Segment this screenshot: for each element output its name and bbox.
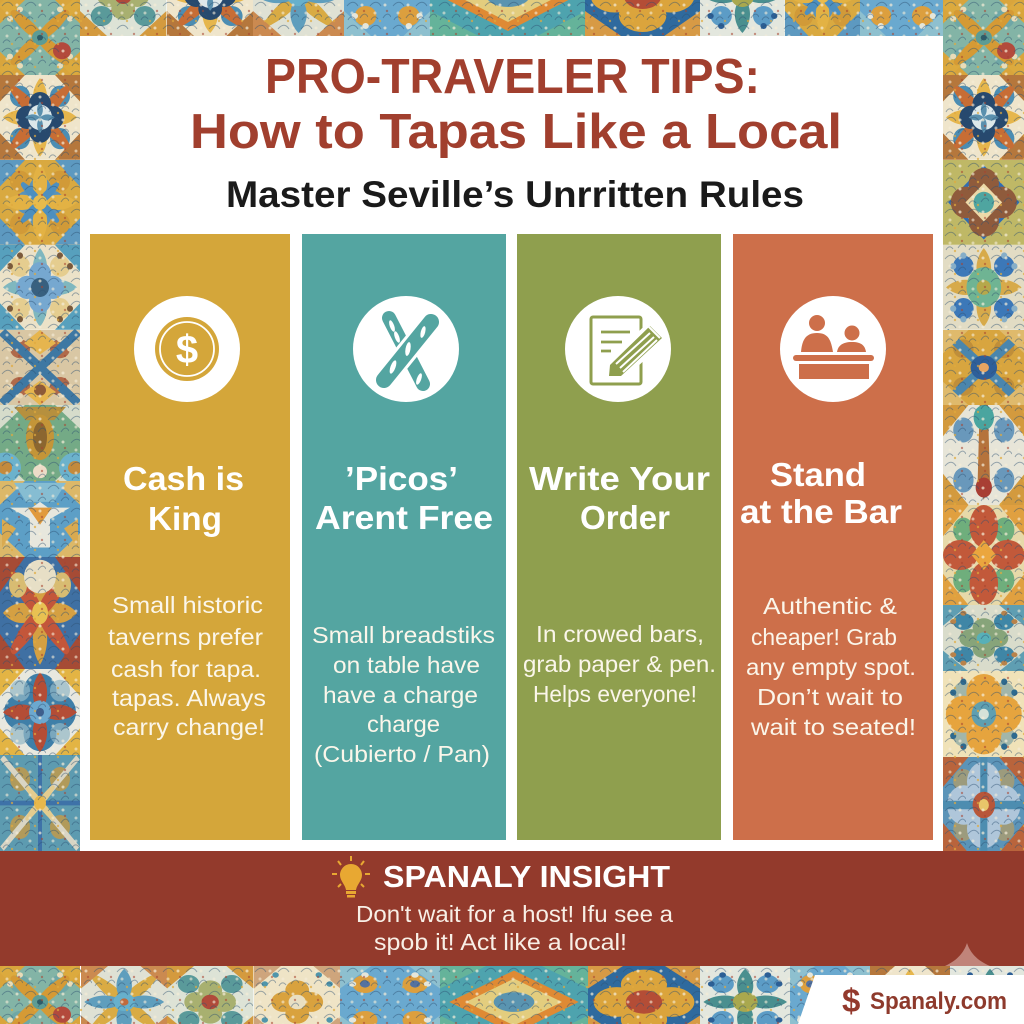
icon: dollar coin: $ xyxy=(176,328,198,372)
text: Stand at the Bar body: any empty spot. xyxy=(746,654,916,680)
heading: Write Your Order xyxy=(529,460,710,536)
heading: Picos Aren't Free: ’Picos’ xyxy=(345,460,458,497)
text: Stand at the Bar body: Authentic & xyxy=(763,593,897,619)
text: Write Your Order body: In crowed bars, xyxy=(536,621,704,647)
panel: Picos Aren't Free xyxy=(302,234,506,840)
text: insight body: Don't wait for a host! Ifu see a xyxy=(356,901,673,927)
text: Stand at the Bar body: wait to seated! xyxy=(750,714,916,740)
title xyxy=(190,50,842,159)
panel: Cash is King xyxy=(90,234,290,840)
text: Cash is King body: taverns prefer xyxy=(108,624,263,650)
tile border: bottom row xyxy=(0,966,1024,1024)
logo: Spanaly.com: $ xyxy=(842,982,860,1019)
text: Picos body: (Cubierto / Pan) xyxy=(314,741,490,767)
heading: Write Your Order: Write Your xyxy=(529,460,710,497)
heading: Stand at the Bar: at the Bar xyxy=(740,493,902,530)
tile border: top row xyxy=(80,0,943,36)
logo: Spanaly.com xyxy=(798,975,1024,1024)
tile border: right column xyxy=(943,0,1024,853)
panel: Write Your Order xyxy=(517,234,721,840)
heading: Stand at the Bar xyxy=(740,456,902,530)
text: insight body: spob it! Act like a local! xyxy=(374,929,627,955)
decorative notch xyxy=(945,943,990,966)
heading: Cash is King: King xyxy=(148,500,222,537)
text: Stand at the Bar body: cheaper! Grab xyxy=(751,624,897,650)
text: Stand at the Bar body: Don’t wait to xyxy=(757,684,903,710)
panel: Stand at the Bar xyxy=(733,234,933,840)
main white panel xyxy=(80,36,943,851)
text: Cash is King body xyxy=(108,592,266,740)
callout: Spanaly Insight band xyxy=(0,851,1024,966)
text: Write Your Order body xyxy=(523,621,716,707)
text: Picos body: have a charge xyxy=(323,682,478,708)
heading: Cash is King: Cash is xyxy=(123,460,244,497)
title: PRO-TRAVELER TIPS: xyxy=(265,50,760,104)
text: Cash is King body: cash for tapa. xyxy=(111,656,261,682)
text: Picos body: Small breadstiks xyxy=(312,622,495,648)
icon: people at a bar xyxy=(780,296,886,402)
text: Cash is King body: tapas. Always xyxy=(112,685,266,711)
subtitle: Master Seville’s Unrritten Rules xyxy=(226,174,804,215)
text: Stand at the Bar body xyxy=(746,593,916,740)
heading: Write Your Order: Order xyxy=(580,499,670,536)
heading: Spanaly Insight: SPANALY INSIGHT xyxy=(383,859,670,894)
title: How to Tapas Like a Local xyxy=(190,105,842,159)
icon: notepad and pencil xyxy=(565,296,671,402)
icon: dollar coin xyxy=(134,296,240,402)
text: Cash is King body: Small historic xyxy=(112,592,263,618)
icon: crossed breadsticks xyxy=(353,296,459,402)
text: Picos body: on table have xyxy=(333,652,480,678)
text: Cash is King body: carry change! xyxy=(113,714,265,740)
tile border: left column xyxy=(0,0,91,851)
text: insight body xyxy=(356,901,673,955)
heading: Stand at the Bar: Stand xyxy=(770,456,866,493)
logo: Spanaly.com: Spanaly.com xyxy=(870,988,1007,1015)
text: Picos body: charge xyxy=(367,711,440,737)
heading: Picos Aren't Free xyxy=(315,460,493,536)
icon: light bulb xyxy=(332,856,370,898)
heading: Cash is King xyxy=(123,460,244,537)
text: Write Your Order body: Helps everyone! xyxy=(533,681,697,707)
text: Write Your Order body: grab paper & pen. xyxy=(523,651,716,677)
text: Picos body xyxy=(312,622,495,767)
heading: Picos Aren't Free: Arent Free xyxy=(315,499,493,536)
